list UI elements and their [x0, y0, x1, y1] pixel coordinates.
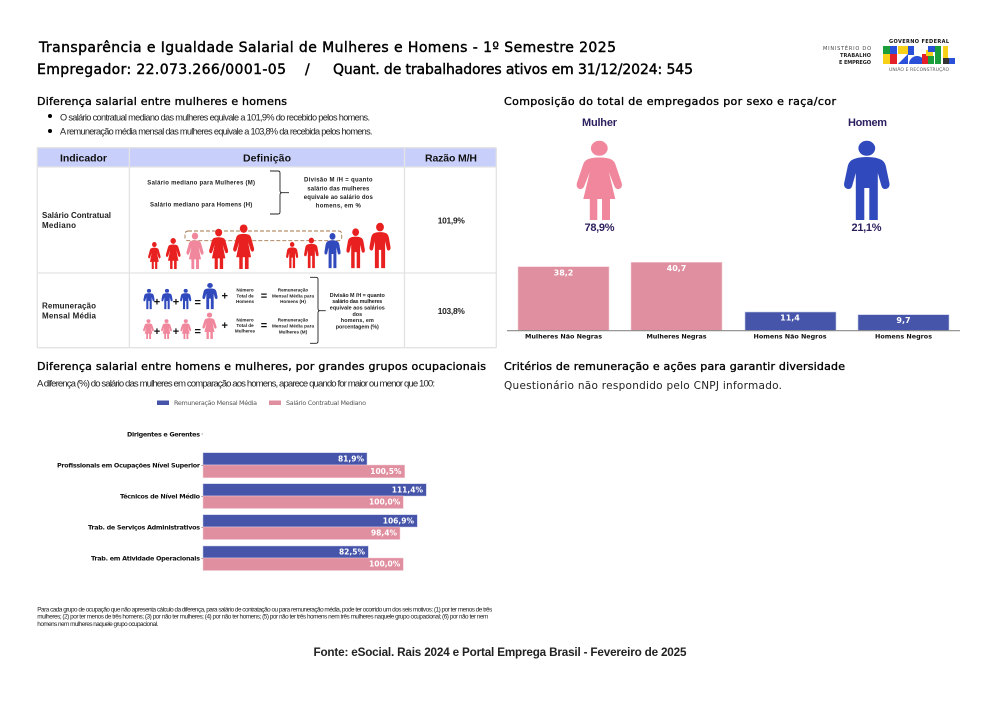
equation: mulheres: Número: [236, 317, 254, 322]
bar chart: sexo e raça/cor: Homens Negros: [875, 332, 932, 340]
bar chart: sexo e raça/cor: Mulheres Negras: [646, 332, 707, 340]
table header: Razão M/H: [425, 152, 477, 164]
definition text: salário das mulheres: [332, 299, 382, 305]
row: salário contratual mediano: Salário mediano para Homens (H): [150, 203, 252, 209]
title: Empregador: 22.073.266/0001-05: [37, 62, 286, 78]
equation: mulheres: =: [194, 326, 201, 338]
heading: diferença por grupos: Diferença salarial entre homens e mulheres, por grandes grupos ocupacionais: [37, 360, 486, 373]
table header: [37, 148, 496, 167]
equation: mulheres: Mensal Média para: [272, 323, 314, 328]
group: profissionais: [203, 453, 405, 478]
category labels: [57, 430, 203, 563]
category labels: Trab. em Atividade Operacionais: [91, 555, 200, 563]
equation: mulheres: +: [221, 320, 228, 332]
legend: Remuneração Mensal Média: [174, 399, 257, 407]
row: remuneração mensal média: Mensal Média: [42, 312, 97, 321]
row: salário contratual mediano: Salário Contratual: [42, 211, 111, 220]
heading: critérios: Critérios de remuneração e ações para garantir diversidade: [504, 360, 845, 373]
equation: homens: =: [261, 291, 267, 303]
table: indicadores: [37, 148, 496, 348]
pictogram: homem: [844, 117, 890, 234]
bar chart: sexo e raça/cor: Mulheres Não Negras: [525, 332, 602, 340]
category labels: Dirigentes e Gerentes: [127, 430, 200, 438]
logo: ministério e governo federal: UNIÃO E RECONSTRUÇÃO: [889, 66, 950, 73]
category labels: Técnicos de Nível Médio: [120, 493, 201, 501]
definition text: Divisão M /H = quanto: [330, 293, 386, 299]
equation: homens: +: [154, 296, 160, 308]
definition text: salário das mulheres: [307, 186, 370, 192]
category labels: Profissionais em Ocupações Nível Superior: [57, 462, 201, 470]
legend: [157, 399, 366, 407]
group: técnicos: [203, 484, 426, 508]
group: serviços administrativos: 106,9%: [383, 516, 414, 526]
equation: mulheres: Total de: [236, 323, 254, 328]
equation: mulheres: =: [261, 320, 267, 332]
definition text: [330, 293, 386, 331]
bar chart: sexo e raça/cor: 11,4: [780, 314, 800, 322]
icons: homens: [286, 223, 391, 268]
footnote: homens nem mulheres naquele grupo ocupacional.: [37, 621, 159, 628]
equation: mulheres: [143, 313, 314, 339]
group: técnicos: 111,4%: [392, 486, 423, 494]
bar chart: sexo e raça/cor: Homens Não Negros: [754, 332, 827, 340]
table header: Definição: [243, 152, 291, 164]
equation: mulheres: +: [173, 326, 179, 338]
heading: composição: Composição do total de empregados por sexo e raça/cor: [504, 95, 836, 108]
bar chart: sexo e raça/cor: 9,7: [896, 316, 911, 325]
group: profissionais: 81,9%: [338, 454, 364, 464]
value: 101,9%: [438, 216, 465, 226]
group: atividade operacionais: 100,0%: [369, 560, 401, 568]
bar chart: sexo e raça/cor: 40,7: [667, 264, 686, 273]
definition text: equivale ao salário dos: [304, 195, 373, 201]
definition text: homens, em %: [316, 204, 361, 210]
group: atividade operacionais: 82,5%: [339, 548, 365, 556]
subheading: A diferença (%) do salário das mulheres em comparação aos homens, aparece quando for maior ou menor que 100:: [37, 378, 435, 390]
logo: ministério e governo federal: TRABALHO: [840, 53, 871, 59]
pictogram: mulher: 78,9%: [584, 222, 615, 234]
group: técnicos: 100,0%: [369, 498, 401, 506]
title: /: [305, 62, 310, 78]
definition text: [304, 178, 373, 210]
equation: mulheres: Mulheres (M): [279, 329, 308, 334]
row: remuneração mensal média: Remuneração: [42, 302, 96, 311]
dashed box: [185, 231, 342, 241]
logo: ministério e governo federal: [823, 39, 955, 73]
definition text: equivale aos salários: [330, 306, 385, 312]
logo: ministério e governo federal: GOVERNO FEDERAL: [889, 39, 950, 45]
equation: homens: Mensal Média para: [272, 293, 314, 298]
brace: [270, 171, 289, 214]
row: salário contratual mediano: Salário mediano para Mulheres (M): [147, 180, 255, 186]
group: profissionais: 100,5%: [370, 467, 402, 476]
logo: ministério e governo federal: MINISTÉRIO DO: [823, 44, 871, 52]
legend: Salário Contratual Mediano: [286, 399, 366, 407]
bullet list: O salário contratual mediano das mulheres equivale a 101,9% do recebido pelos homens.: [60, 112, 370, 122]
title: Transparência e Igualdade Salarial de Mulheres e Homens - 1º Semestre 2025: [38, 40, 616, 56]
equation: homens: Homens: [236, 299, 255, 304]
bar chart: grupos ocupacionais: [57, 430, 426, 570]
pictogram: mulher: Mulher: [582, 117, 618, 129]
equation: homens: [143, 283, 314, 309]
bar chart: sexo e raça/cor: 38,2: [554, 268, 573, 278]
group: serviços administrativos: [203, 515, 417, 540]
definition text: homens, em: [341, 318, 374, 324]
title: [37, 40, 693, 78]
equation: homens: +: [221, 290, 228, 302]
definition text: Divisão M /H = quanto: [304, 178, 373, 184]
equation: homens: Total de: [236, 293, 254, 298]
table header: Indicador: [60, 152, 107, 164]
bullet list: [48, 112, 373, 137]
source: Fonte: eSocial. Rais 2024 e Portal Emprega Brasil - Fevereiro de 2025: [314, 646, 687, 659]
value: 103,8%: [438, 306, 465, 316]
definition text: porcentagem (%): [336, 325, 379, 331]
title: Quant. de trabalhadores ativos em 31/12/2024: 545: [333, 62, 693, 78]
row: salário contratual mediano: Mediano: [42, 221, 76, 230]
equation: mulheres: Mulheres: [235, 329, 256, 334]
pictogram: homem: Homem: [848, 117, 887, 129]
pictogram: homem: 21,1%: [852, 222, 882, 234]
logo: ministério e governo federal: E EMPREGO: [839, 60, 871, 66]
footnote: [37, 606, 492, 628]
equation: homens: Homens (H): [280, 299, 306, 304]
equation: mulheres: Remuneração: [278, 317, 308, 322]
bar chart: sexo e raça/cor: [507, 262, 960, 340]
pictogram: mulher: [577, 117, 622, 234]
row: salário contratual mediano: [42, 171, 465, 269]
text: questionário: Questionário não respondido pelo CNPJ informado.: [504, 380, 782, 392]
definition text: dos: [353, 312, 362, 318]
bullet list: A remuneração média mensal das mulheres equivale a 103,8% da recebida pelos homens.: [60, 127, 373, 137]
equation: homens: Remuneração: [278, 288, 308, 293]
row: remuneração mensal média: [42, 277, 465, 343]
equation: homens: +: [173, 296, 179, 308]
group: atividade operacionais: [203, 546, 403, 570]
heading: diferença salarial: Diferença salarial entre mulheres e homens: [37, 95, 287, 108]
icons: mulheres: [148, 224, 254, 269]
equation: homens: =: [194, 297, 201, 309]
equation: homens: Número: [236, 288, 254, 293]
brace: [310, 277, 326, 343]
footnote: Para cada grupo de ocupação que não apresenta cálculo da diferença, para salário de contratação ou para remuneração média, pode ter ocorrido um dos seis motivos: (1) por ter menos de três: [37, 606, 492, 613]
group: serviços administrativos: 98,4%: [371, 528, 397, 538]
equation: mulheres: +: [154, 326, 160, 338]
footnote: mulheres; (2) por ter menos de três homens; (3) por não ter mulheres; (4) por não ter homens; (5) por não ter três homens nem três mulheres naquele grupo ocupacional; (6) por não ter nem: [37, 614, 488, 621]
category labels: Trab. de Serviços Administrativos: [88, 524, 200, 532]
